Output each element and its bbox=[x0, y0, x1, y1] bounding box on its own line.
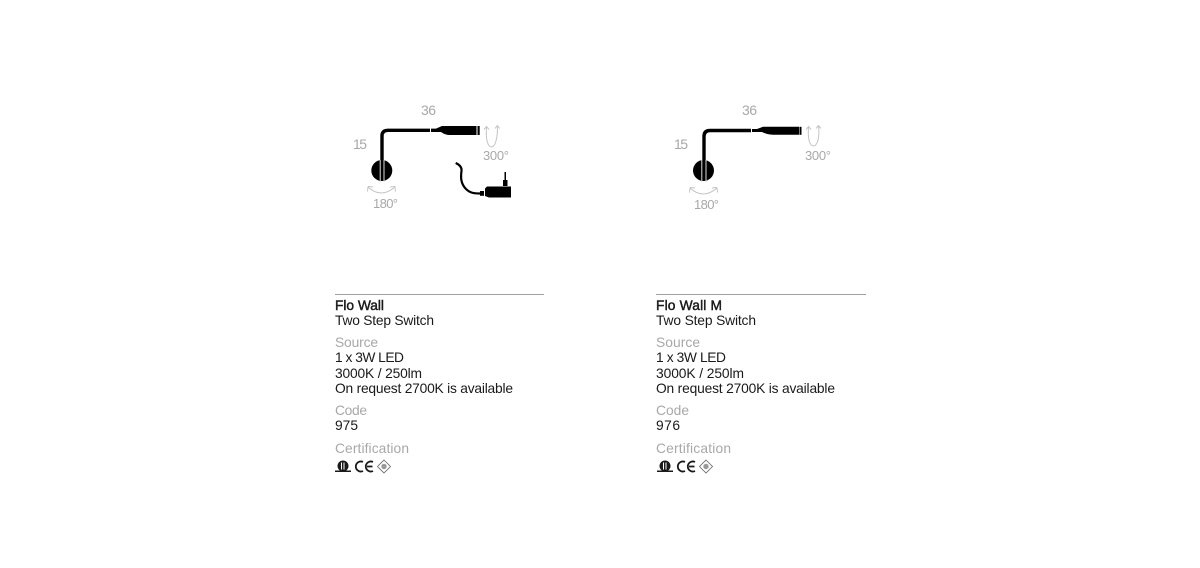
text block: source details: 3000K / 250lm bbox=[335, 366, 422, 381]
icon: rotation arrow 300 degrees bbox=[484, 126, 500, 147]
icon: wall lamp bbox=[693, 127, 802, 182]
heading: Flo Wall: Flo Wall bbox=[335, 298, 384, 313]
label: Code: Code bbox=[656, 403, 689, 418]
icon: rotation arrow 180 degrees bbox=[690, 188, 718, 194]
heading: Flo Wall M: Flo Wall M bbox=[656, 298, 722, 313]
icon: power adapter bbox=[456, 163, 511, 198]
text block: source details: 3000K / 250lm bbox=[656, 366, 744, 381]
panel: Flo Wall M specifications bbox=[656, 294, 866, 473]
panel: Flo Wall specifications bbox=[335, 294, 544, 473]
label: Source: Source bbox=[335, 335, 378, 350]
label: rotation 300 degrees: 300° bbox=[805, 148, 831, 163]
label: arm length 36: 36 bbox=[742, 102, 757, 118]
label: Certification: Certification bbox=[335, 441, 409, 456]
label: Source: Source bbox=[656, 335, 700, 350]
panel: Flo Wall M diagram bbox=[674, 102, 831, 212]
label: Code: Code bbox=[335, 403, 367, 418]
value: code 975: 975 bbox=[335, 418, 358, 433]
label: rotation 180 degrees: 180° bbox=[694, 197, 719, 212]
icons: certification marks bbox=[657, 460, 712, 473]
subheading: switch type: Two Step Switch bbox=[335, 313, 434, 328]
text block: source details: On request 2700K is available bbox=[656, 381, 835, 396]
label: rotation 180 degrees: 180° bbox=[373, 196, 398, 211]
icon: rotation arrow 300 degrees bbox=[806, 126, 821, 146]
text block: source details: 1 x 3W LED bbox=[335, 350, 404, 365]
icon: wall lamp bbox=[371, 126, 480, 182]
label: Certification: Certification bbox=[656, 441, 731, 456]
text block: source details: 1 x 3W LED bbox=[656, 350, 726, 365]
label: height 15: 15 bbox=[353, 136, 367, 152]
icon: rotation arrow 180 degrees bbox=[368, 186, 396, 193]
label: rotation 300 degrees: 300° bbox=[483, 148, 509, 163]
subheading: switch type: Two Step Switch bbox=[656, 313, 756, 328]
value: code 976: 976 bbox=[656, 418, 680, 433]
label: arm length 36: 36 bbox=[421, 102, 436, 118]
label: height 15: 15 bbox=[674, 136, 688, 152]
text block: source details bbox=[656, 350, 835, 396]
panel: Flo Wall diagram bbox=[353, 102, 511, 211]
text block: source details: On request 2700K is available bbox=[335, 381, 513, 396]
icons: certification marks bbox=[335, 460, 390, 473]
text block: source details bbox=[335, 350, 513, 396]
